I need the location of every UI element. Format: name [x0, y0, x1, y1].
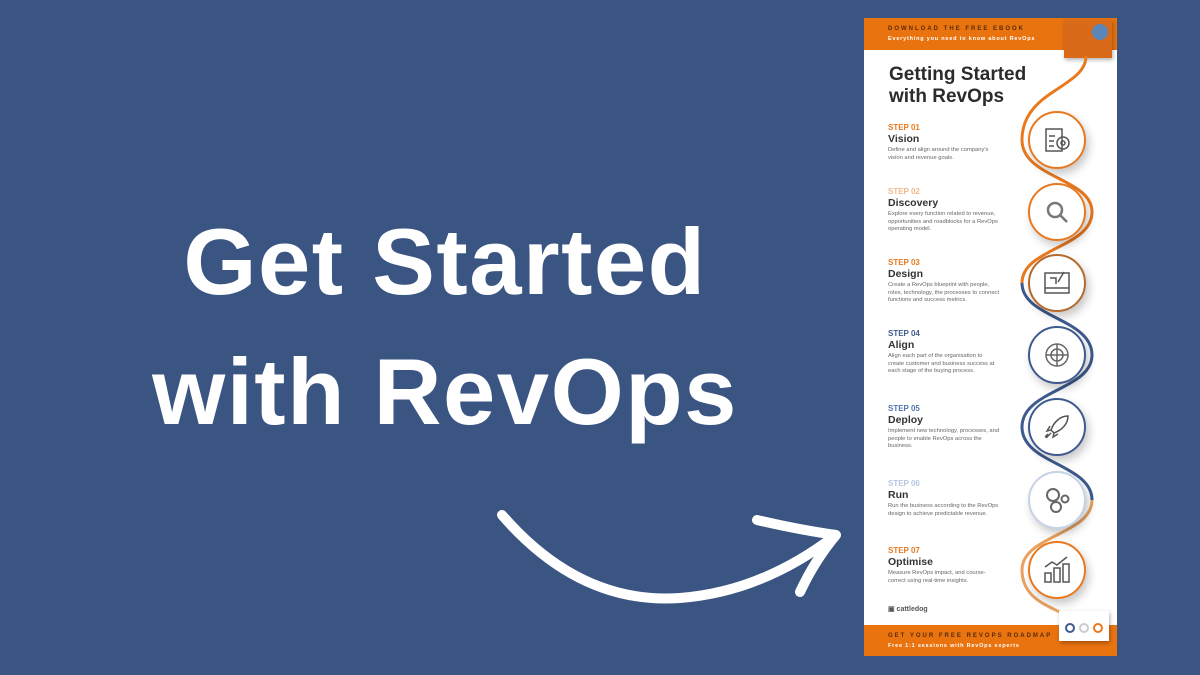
step 05 [888, 404, 999, 449]
step 04: Align [888, 339, 914, 351]
step 03: Create a RevOps blueprint with people, roles, technology, the processes to connect functions and success metrics. [888, 282, 999, 303]
step 06 [888, 479, 998, 516]
title: Getting Started [889, 64, 1026, 85]
step 01 [888, 123, 988, 160]
step 02: STEP 02 [888, 187, 920, 196]
step 07 [888, 546, 986, 584]
step 03: STEP 03 [888, 258, 920, 267]
step 02: Discovery [888, 197, 938, 209]
step 01: STEP 01 [888, 123, 920, 132]
footer banner: Free 1:1 sessions with RevOps experts [888, 643, 1020, 649]
footer banner [864, 625, 1117, 656]
step 03: Design [888, 268, 923, 280]
step 06: STEP 06 [888, 479, 920, 488]
step 07: Optimise [888, 556, 933, 568]
step 04: STEP 04 [888, 329, 920, 338]
heading: Get Started: Get Started [183, 209, 707, 314]
step 01: Vision [888, 133, 919, 145]
step 02 [888, 187, 998, 232]
header banner [864, 18, 1117, 50]
step 07: STEP 07 [888, 546, 920, 555]
step 06: Run [888, 489, 908, 501]
footer banner: GET YOUR FREE REVOPS ROADMAP [888, 633, 1052, 639]
step 04: Align each part of the organisation to create customer and business success at each stage of the buying process. [888, 353, 994, 374]
title: with RevOps [889, 86, 1004, 107]
step 05: Implement new technology, processes, and people to enable RevOps across the business. [888, 428, 999, 449]
header banner: DOWNLOAD THE FREE EBOOK [888, 26, 1025, 32]
step 04 [888, 329, 994, 374]
curve path [1020, 56, 1094, 614]
icon circles [1027, 111, 1093, 608]
title [889, 64, 1026, 107]
heading: with RevOps: with RevOps [152, 339, 738, 444]
step 07: Measure RevOps impact, and course-correct using real-time insights. [888, 570, 986, 584]
infographic panel [864, 18, 1117, 656]
header banner: Everything you need to know about RevOps [888, 36, 1035, 42]
step 03 [888, 258, 1000, 303]
logo: ▣ cattledog [888, 606, 928, 613]
step 01: Define and align around the company's vision and revenue goals. [888, 147, 988, 160]
step 02: Explore every function related to revenue, opportunities and roadblocks for a RevOps operating model. [888, 211, 998, 232]
step 05: STEP 05 [888, 404, 920, 413]
step 05: Deploy [888, 414, 923, 426]
step 06: Run the business according to the RevOps design to achieve predictable revenue. [888, 503, 998, 516]
